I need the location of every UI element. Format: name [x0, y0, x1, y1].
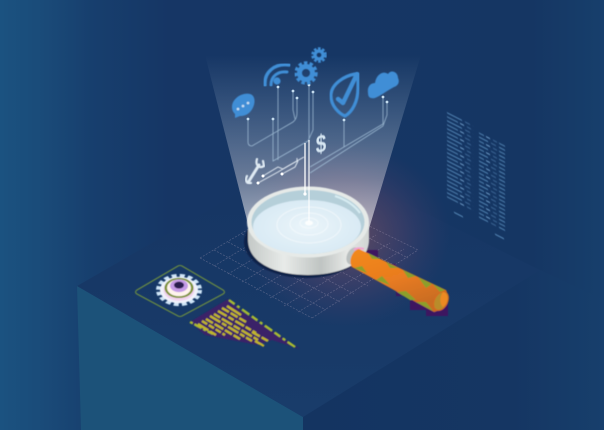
handle green patches: [354, 253, 445, 311]
cube: right face: [303, 270, 604, 430]
lens rim side wall: [248, 222, 369, 275]
lens recess: [252, 190, 364, 254]
icon: gears: [296, 48, 326, 83]
central light beam lines: [303, 140, 309, 222]
trace nodes: [247, 84, 388, 184]
bright lower traces: [258, 157, 304, 183]
concentric ripples: [277, 207, 341, 243]
handle body: [350, 249, 447, 312]
icon: wrench: [246, 159, 264, 183]
code snippet: [190, 299, 300, 349]
lens rim top: [247, 186, 369, 258]
icon: shield with check: [331, 74, 358, 116]
circuit traces: [248, 85, 387, 173]
column footers: [454, 212, 504, 240]
magnifying glass: [244, 186, 451, 316]
lens surface: [253, 200, 361, 254]
left column of data: [447, 112, 473, 213]
lens highlight: [335, 196, 360, 213]
gear badge: [136, 266, 224, 316]
purple code backdrop: [190, 299, 300, 349]
icon: cloud: [368, 71, 399, 98]
icon: dollar sign: $: [316, 128, 326, 159]
data columns on the back wall: [447, 112, 505, 240]
handle shadow blocks: [366, 250, 448, 316]
warm glow on surface: [240, 143, 450, 327]
cube: top face: [77, 154, 540, 417]
badge diamond outline: [136, 266, 224, 316]
code lines: [190, 300, 295, 347]
handle end cap: [431, 289, 451, 313]
isometric dashed grid: [200, 195, 418, 318]
gear teeth: [158, 276, 200, 304]
light beam: [205, 55, 421, 232]
ferrule pink accent: [354, 248, 364, 250]
icon: wifi signal: [265, 65, 289, 85]
right column of data: [479, 131, 505, 233]
light spot: [305, 220, 313, 226]
icon: chat bubble: [232, 94, 255, 118]
handle ferrule: [344, 245, 362, 267]
ground shadow: [244, 206, 368, 278]
cube: left face: [77, 286, 303, 430]
